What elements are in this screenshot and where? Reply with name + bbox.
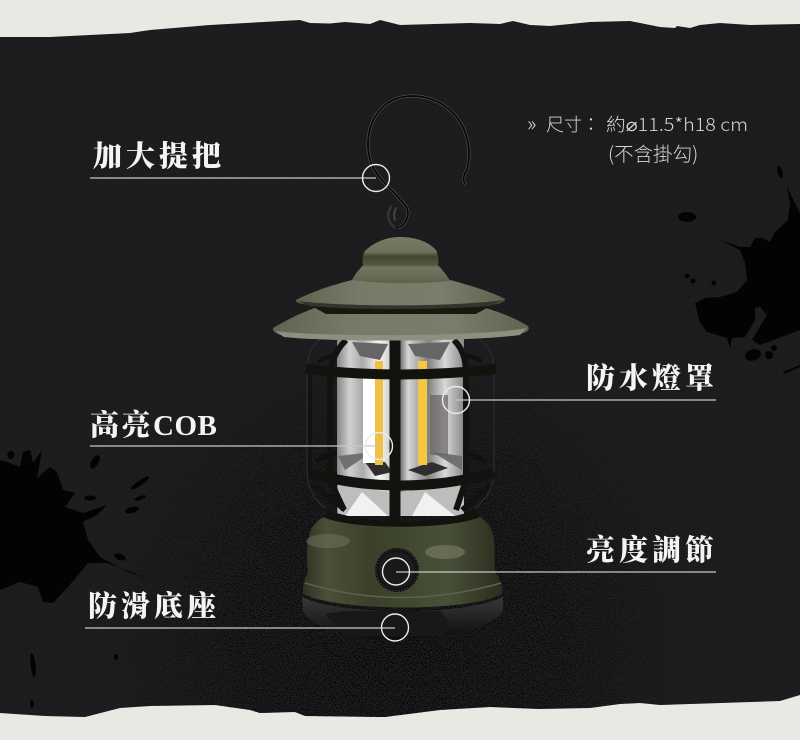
dark gap below upper shade [308, 304, 494, 314]
callout: brightness dial [382, 533, 718, 585]
callout: waterproof shade: 防水燈罩 [586, 362, 718, 395]
callout: non-slip base [85, 589, 408, 641]
callout: brightness dial: 亮度調節 [586, 533, 718, 567]
callout: handle [90, 139, 390, 192]
size specification text: 尺寸： [546, 111, 600, 137]
size specification text [527, 108, 748, 167]
lid dome [352, 237, 450, 283]
lower shade [273, 307, 529, 340]
callout: high-brightness COB: 高亮COB [90, 408, 217, 442]
size specification text: 約⌀11.5*h18 cm [606, 111, 748, 137]
olive base body [303, 517, 502, 608]
black non-slip base [302, 597, 503, 639]
hook [368, 96, 469, 238]
lantern product [273, 96, 529, 639]
ink splatter: right [678, 166, 800, 374]
callout: waterproof shade [442, 362, 718, 414]
callout: high-brightness COB [90, 408, 392, 460]
ink splatter: left [0, 450, 150, 708]
glass globe with reflections [337, 336, 464, 516]
black cage frame [306, 338, 496, 526]
size specification text: (不含掛勾) [608, 138, 698, 167]
callout: handle: 加大提把 [93, 139, 225, 173]
back wire cage and rear rings [307, 340, 494, 508]
upper shade [296, 280, 505, 309]
callout: non-slip base: 防滑底座 [88, 589, 220, 623]
dimmer knob [375, 548, 419, 592]
size specification text: » [527, 108, 536, 138]
